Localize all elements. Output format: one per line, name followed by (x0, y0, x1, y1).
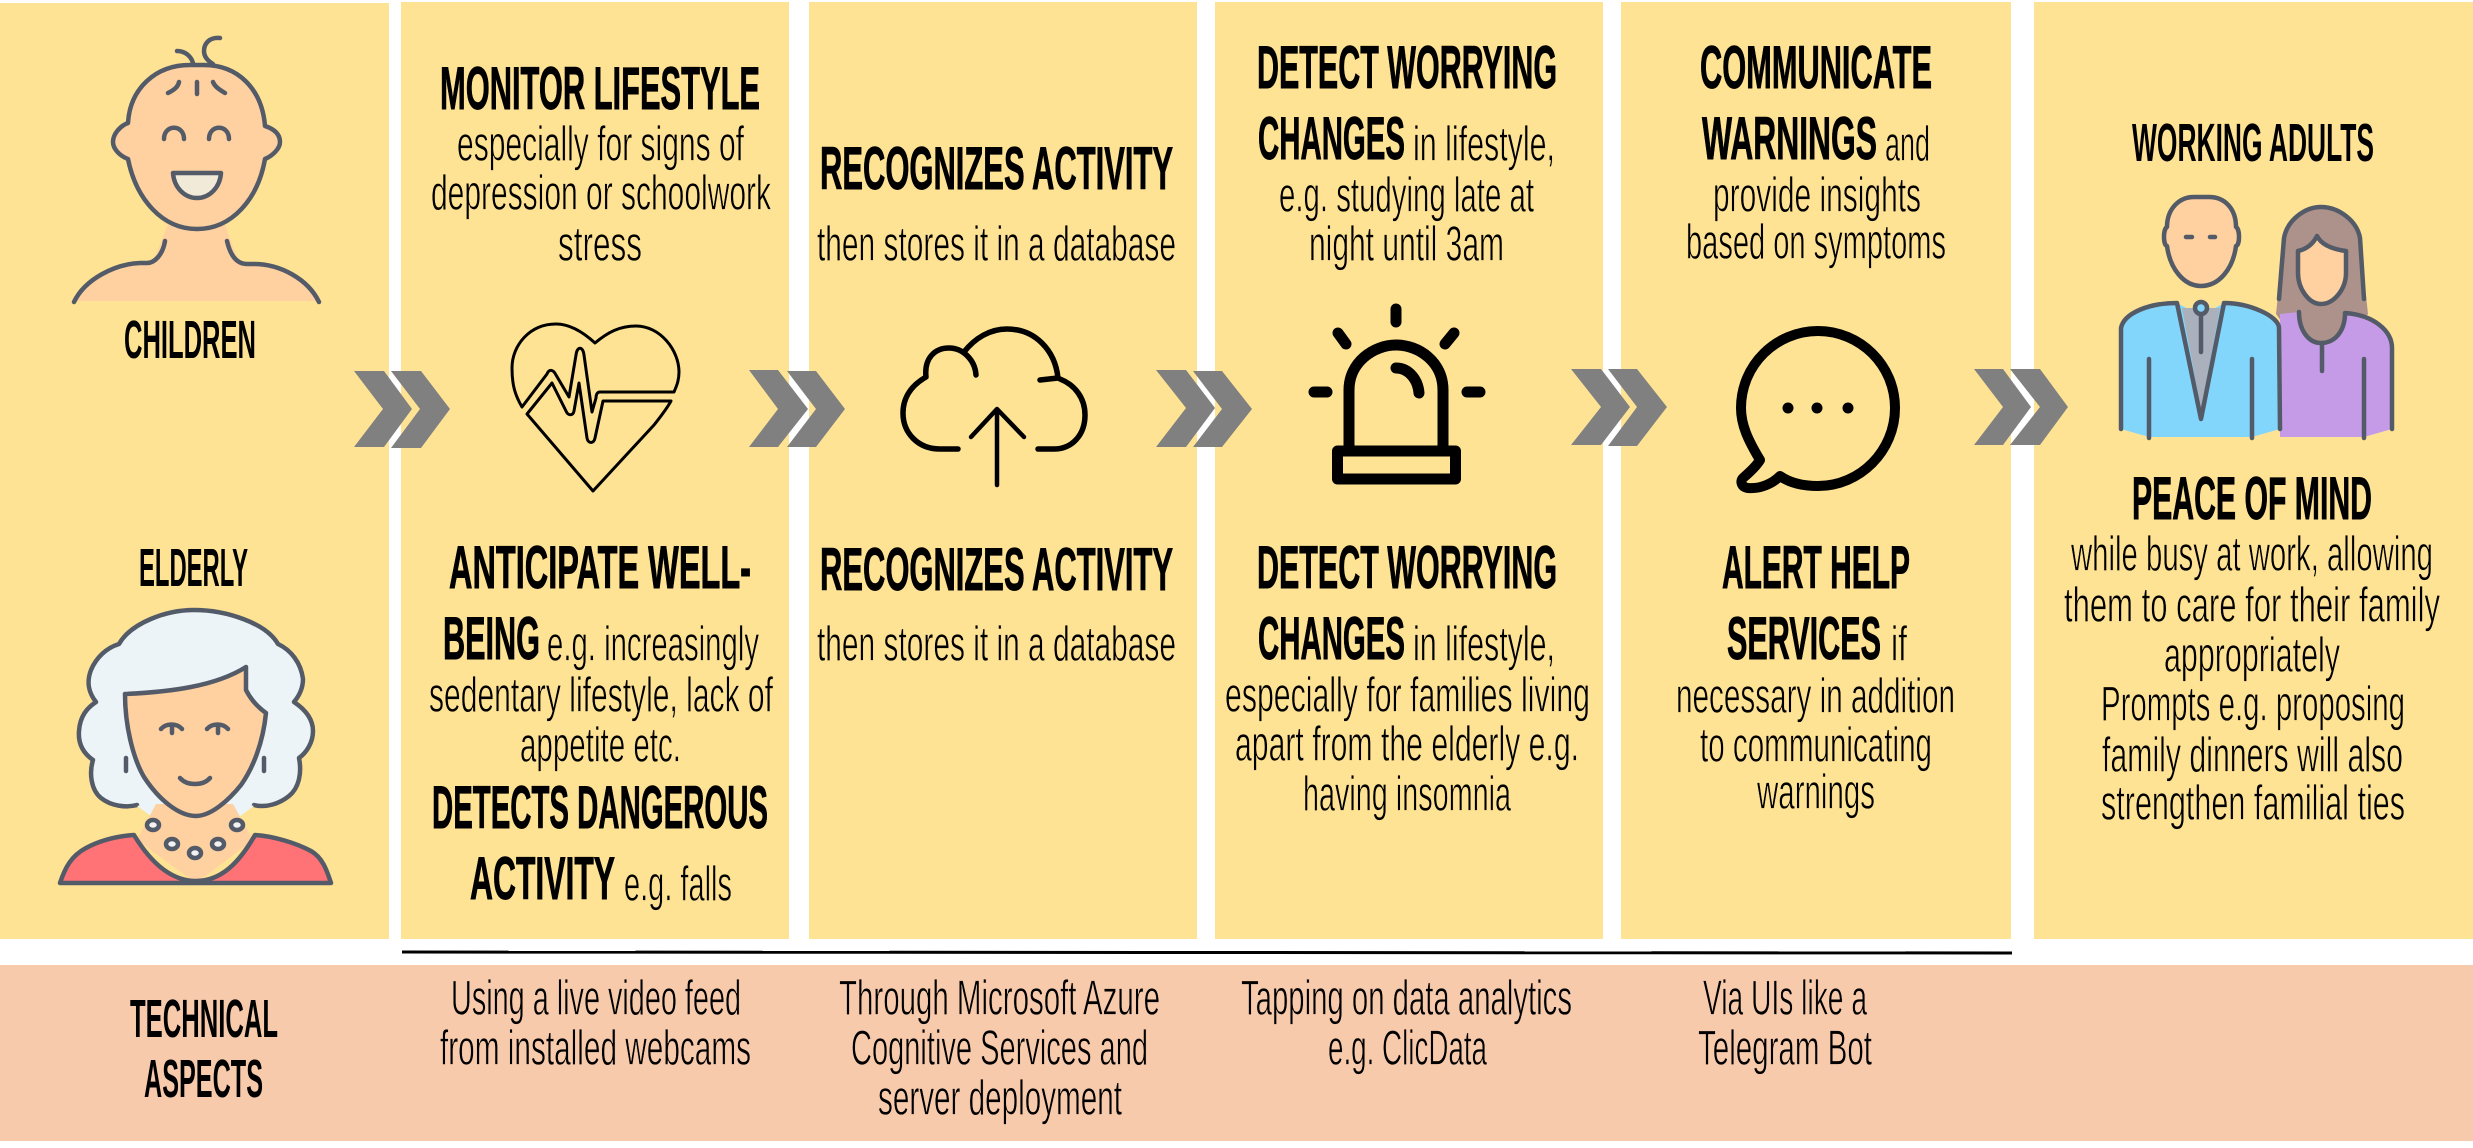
text: anticipate well-being (429, 534, 773, 772)
text: tech recognize: Cognitive Services and (851, 1022, 1148, 1076)
arrow: communicate to adults (1974, 369, 2068, 445)
panel: monitor (401, 2, 789, 939)
text: detect worrying changes bottom: apart from the elderly e.g. (1235, 718, 1579, 772)
text: DETECTS DANGEROUS (432, 774, 768, 841)
text: tech recognize (839, 972, 1160, 1126)
text: detects dangerous activity: e.g. falls (624, 858, 732, 912)
text: tech recognize: server deployment (878, 1072, 1122, 1126)
text: communicate warnings: COMMUNICATE (1700, 34, 1932, 101)
arrow: recognize to detect (1156, 370, 1252, 447)
icon: speech bubble (1741, 331, 1895, 488)
heading: technical aspects (130, 989, 278, 1109)
text: tech detect (1241, 972, 1572, 1076)
text: recognizes activity top: RECOGNIZES ACTIVITY (820, 135, 1173, 202)
icon: siren (1314, 309, 1480, 479)
divider line above technical band (402, 952, 2012, 953)
text: alert help services: to communicating (1700, 718, 1932, 772)
text: alert help services: ALERT HELP (1722, 534, 1910, 601)
text: detect worrying changes bottom: having insomnia (1303, 768, 1511, 822)
arrow: groups to monitor (354, 371, 450, 448)
text: detect worrying changes top: DETECT WORRYING (1257, 34, 1557, 101)
text: tech detect: Tapping on data analytics (1241, 972, 1572, 1026)
arrow: detect to communicate (1571, 369, 1667, 446)
text: tech recognize: Through Microsoft Azure (839, 972, 1160, 1026)
text: alert help services (1676, 534, 1955, 820)
panel: target groups (0, 3, 389, 939)
text: tech communicate: Telegram Bot (1698, 1022, 1872, 1076)
text: communicate warnings: WARNINGS (1702, 105, 1877, 172)
icon: elderly woman (60, 610, 331, 883)
text: communicate warnings: and (1885, 118, 1930, 172)
text: tech detect: e.g. ClicData (1328, 1022, 1487, 1076)
arrow: monitor to recognize (749, 370, 845, 447)
text: detect worrying changes top: CHANGES (1258, 105, 1405, 172)
text: recognizes activity bottom (817, 536, 1176, 672)
panel: recognize (809, 2, 1197, 939)
text: detect worrying changes top: e.g. studying late at (1279, 168, 1534, 222)
text: tech monitor: from installed webcams (440, 1022, 751, 1076)
text: tech monitor: Using a live video feed (451, 972, 741, 1026)
text: detect worrying changes bottom: especially for families living (1225, 668, 1590, 722)
icon: child (74, 38, 319, 302)
text: peace of mind: appropriately (2164, 628, 2340, 682)
text: monitor lifestyle: stress (558, 218, 642, 272)
text: detect worrying changes bottom: in lifestyle, (1413, 618, 1555, 672)
panel: communicate (1621, 2, 2011, 939)
panel: detect (1215, 2, 1603, 939)
text: anticipate well-being: BEING (443, 605, 540, 672)
text: recognizes activity top (817, 135, 1176, 272)
text: communicate warnings (1686, 34, 1946, 270)
text: alert help services: warnings (1756, 766, 1875, 820)
heading: technical aspects: ASPECTS (144, 1049, 263, 1109)
text: alert help services: necessary in addition (1676, 670, 1955, 724)
text: anticipate well-being: sedentary lifestyle, lack of (429, 668, 773, 722)
text: recognizes activity bottom: then stores it in a database (817, 618, 1176, 672)
text: TECHNICAL (130, 989, 278, 1049)
text: anticipate well-being: appetite etc. (520, 718, 681, 772)
icon: cloud upload (903, 329, 1085, 485)
text: detects dangerous activity: ACTIVITY (470, 845, 615, 912)
text: monitor lifestyle: depression or schoolwork (431, 166, 771, 220)
text: CHILDREN (124, 310, 256, 370)
text: ELDERLY (139, 538, 248, 598)
text: peace of mind (2064, 465, 2440, 830)
text: anticipate well-being: ANTICIPATE WELL- (449, 534, 751, 601)
text: monitor lifestyle: especially for signs of (457, 118, 744, 172)
text: monitor lifestyle (431, 55, 771, 272)
text: detect worrying changes bottom (1225, 534, 1590, 822)
text: communicate warnings: based on symptoms (1686, 216, 1946, 270)
text: tech monitor (440, 972, 751, 1076)
text: monitor lifestyle: MONITOR LIFESTYLE (440, 55, 760, 122)
panel: working adults (2034, 2, 2473, 939)
text: detect worrying changes top (1257, 34, 1557, 272)
text: anticipate well-being: e.g. increasingly (547, 618, 759, 672)
text: alert help services: if (1891, 618, 1907, 672)
panel: technical aspects band (0, 965, 2473, 1141)
icon: heart with pulse (512, 324, 679, 491)
text: alert help services: SERVICES (1727, 605, 1881, 672)
text: detect worrying changes bottom: DETECT WORRYING (1257, 534, 1557, 601)
text: recognizes activity top: then stores it in a database (817, 218, 1176, 272)
text: recognizes activity bottom: RECOGNIZES ACTIVITY (820, 536, 1173, 603)
text: detect worrying changes bottom: CHANGES (1258, 605, 1405, 672)
text: tech communicate: Via UIs like a (1703, 972, 1867, 1026)
text: tech communicate (1698, 972, 1872, 1076)
icon: working adults couple (2121, 197, 2392, 438)
text: communicate warnings: provide insights (1713, 168, 1921, 222)
text: detects dangerous activity (432, 774, 768, 912)
text: detect worrying changes top: in lifestyle, (1413, 118, 1555, 172)
text: detect worrying changes top: night until 3am (1309, 218, 1504, 272)
